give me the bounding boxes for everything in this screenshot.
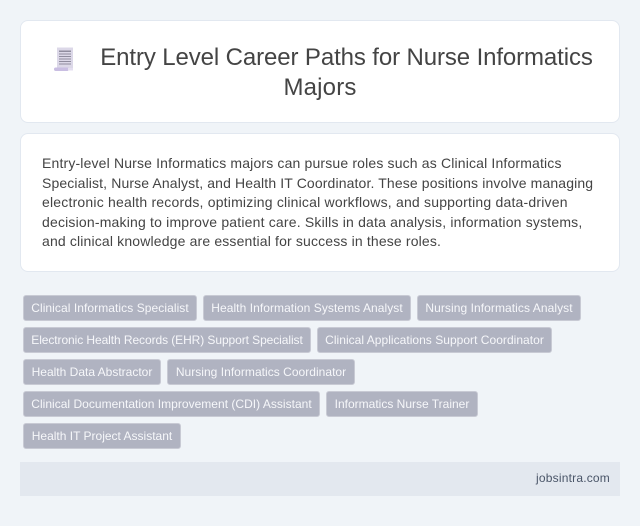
- summary text: [42, 155, 593, 249]
- icon: document scroll: [54, 48, 73, 71]
- heading: Majors: [283, 74, 357, 101]
- summary text: Entry-level Nurse Informatics majors can pursue roles such as Clinical Informatics: [42, 155, 562, 171]
- tag: [23, 359, 161, 385]
- tag: [417, 295, 581, 321]
- footer text: jobsintra.com: [536, 471, 610, 485]
- tag: Clinical Documentation Improvement (CDI) Assistant: [31, 397, 312, 411]
- summary text: electronic health records, optimizing clinical workflows, and supporting data-driven: [42, 194, 568, 210]
- tag: Clinical Applications Support Coordinator: [325, 333, 544, 347]
- footer bar: [20, 462, 620, 496]
- tag: [23, 391, 320, 417]
- tag: Clinical Informatics Specialist: [31, 301, 189, 315]
- tag: [23, 327, 311, 353]
- tag: Health Data Abstractor: [32, 365, 152, 379]
- tag: [23, 423, 181, 449]
- tag: [326, 391, 478, 417]
- tag: Nursing Informatics Coordinator: [176, 365, 346, 379]
- panel: career tags: [23, 295, 581, 449]
- summary text: and clinical knowledge are essential for success in these roles.: [42, 233, 441, 249]
- heading: [100, 44, 593, 101]
- tag: Health Information Systems Analyst: [211, 301, 403, 315]
- tag: [167, 359, 355, 385]
- panel: summary: [20, 133, 620, 272]
- tag: [23, 295, 197, 321]
- summary text: Specialist, Nurse Analyst, and Health IT Coordinator. These positions involve managing: [42, 175, 593, 191]
- tag: Health IT Project Assistant: [32, 429, 172, 443]
- tag: [317, 327, 552, 353]
- summary text: decision-making to improve patient care. Skills in data analysis, information systems,: [42, 214, 582, 230]
- tag: Electronic Health Records (EHR) Support Specialist: [31, 333, 303, 347]
- tag: Nursing Informatics Analyst: [425, 301, 573, 315]
- panel: title card: [20, 20, 620, 123]
- tag: [203, 295, 411, 321]
- tag: Informatics Nurse Trainer: [335, 397, 469, 411]
- heading: Entry Level Career Paths for Nurse Informatics: [100, 44, 593, 71]
